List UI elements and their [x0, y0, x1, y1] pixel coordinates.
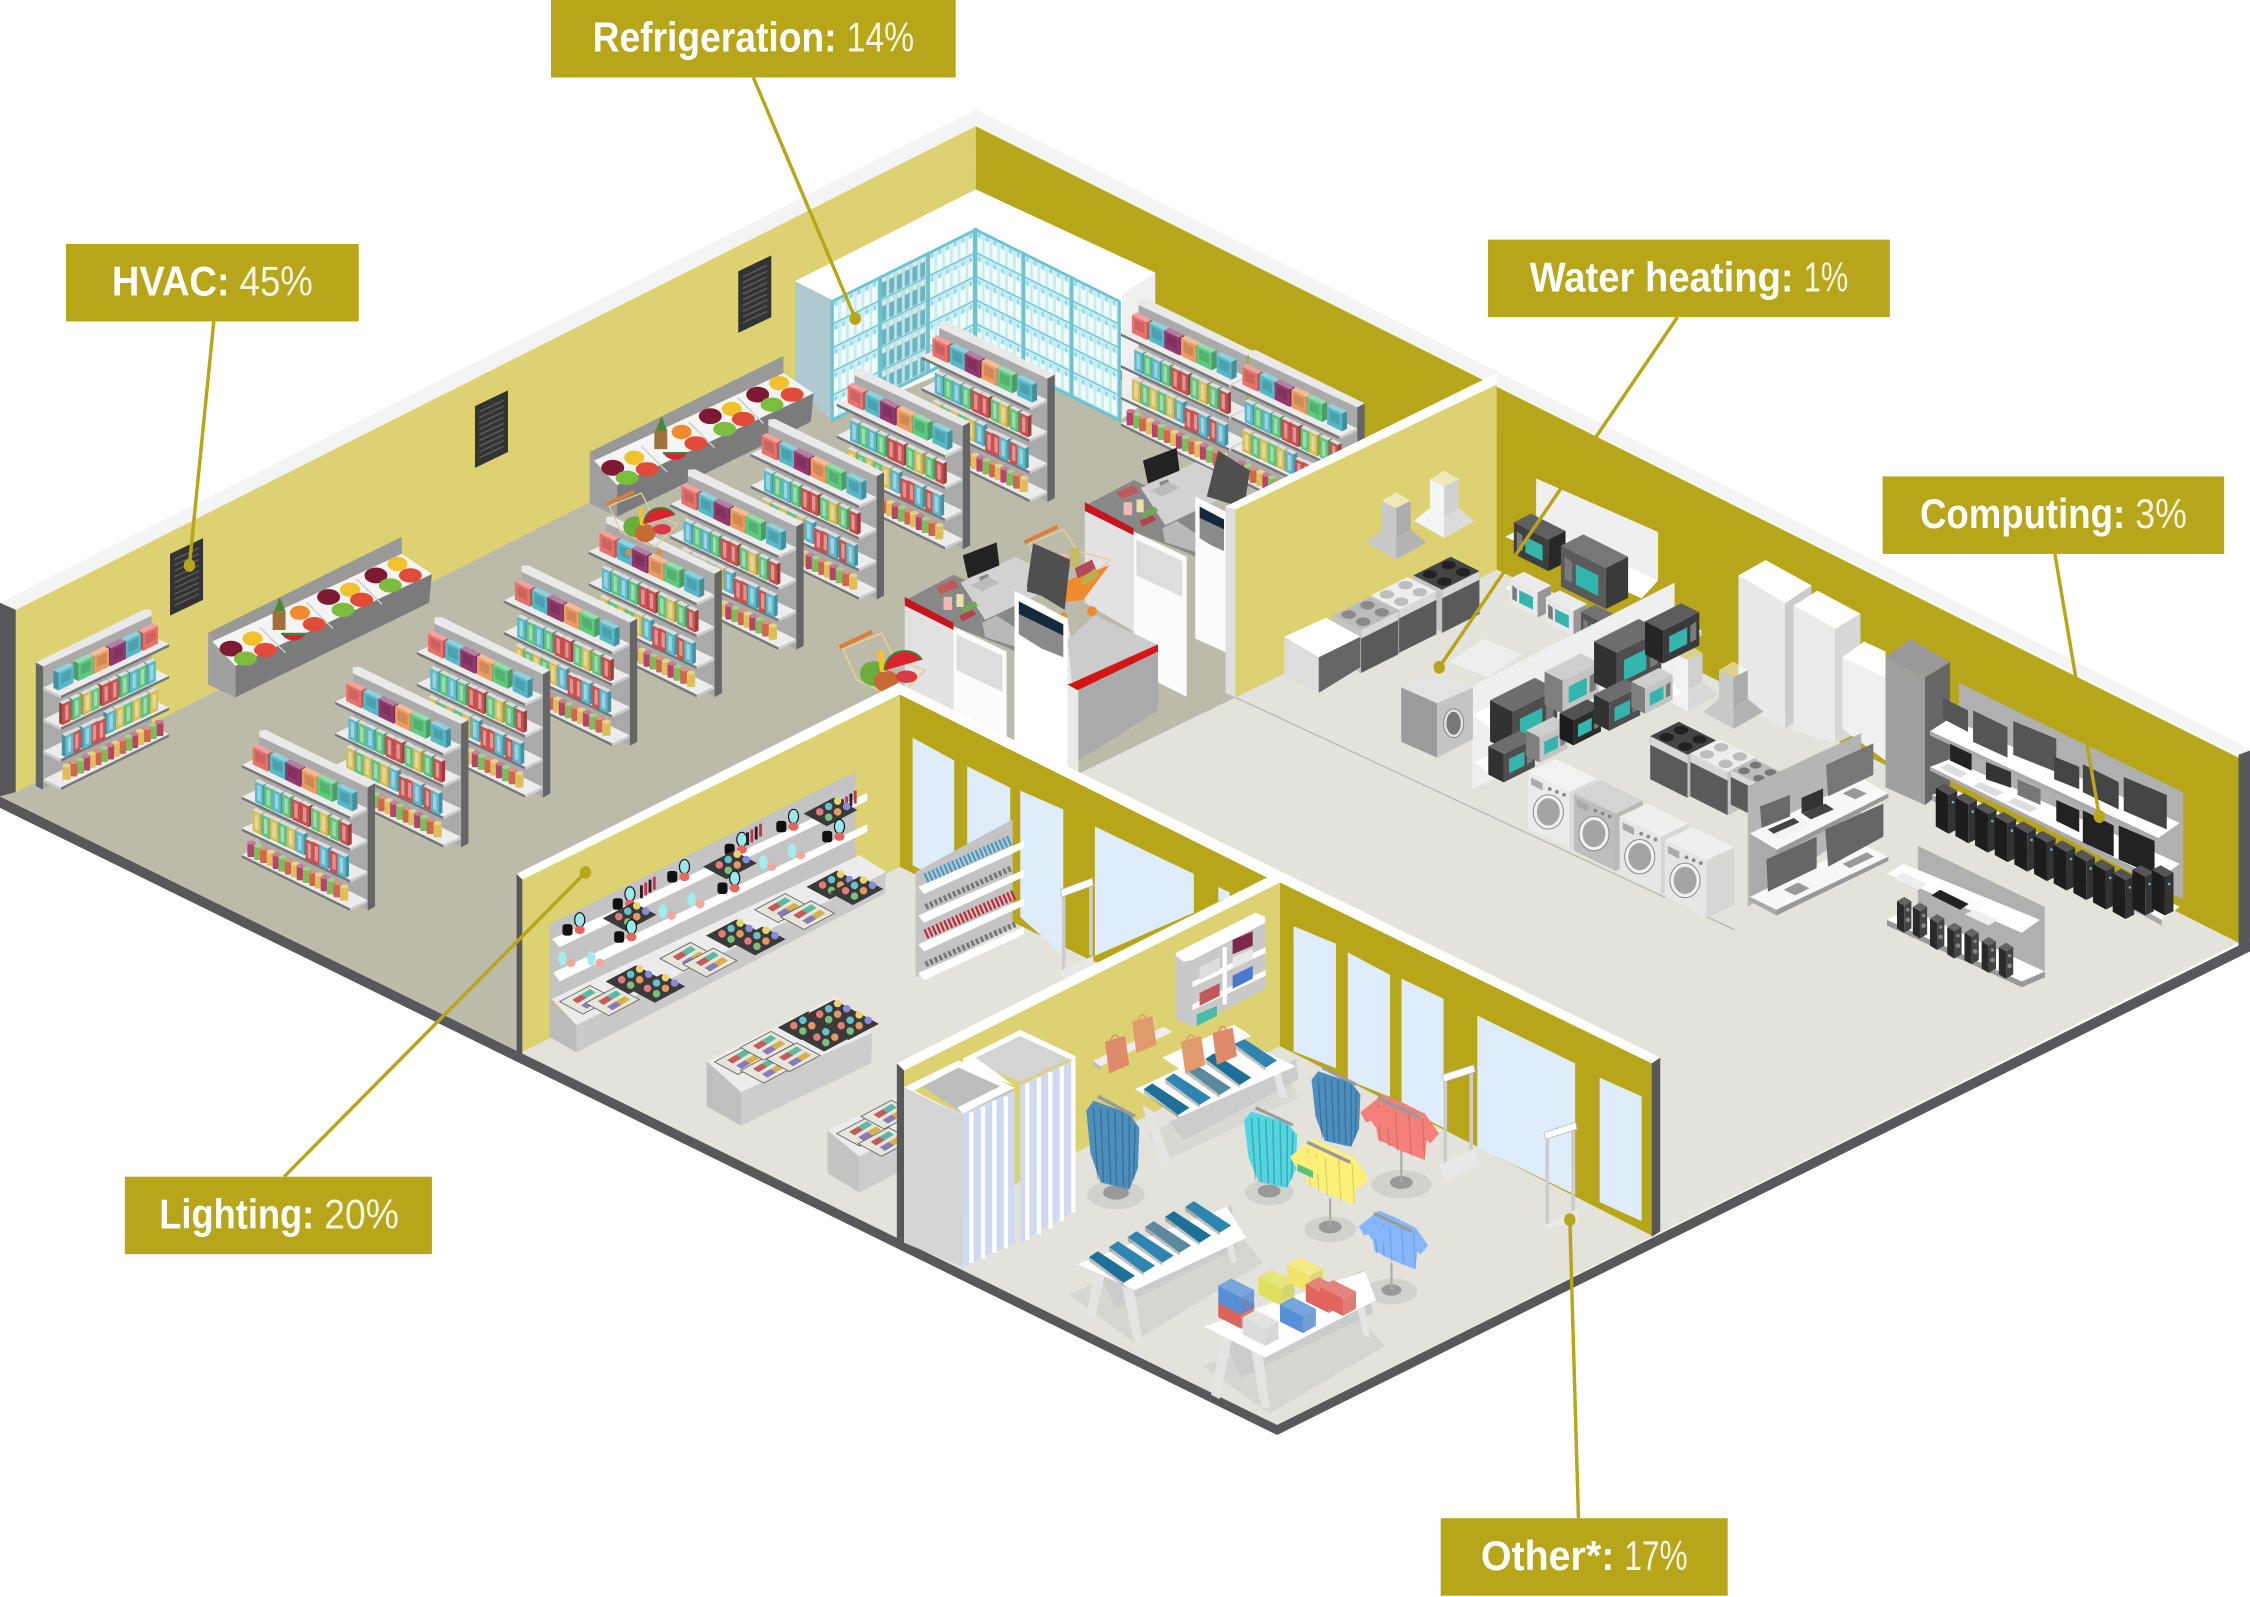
microwave island — [1450, 583, 1702, 789]
leader: lighting — [284, 866, 591, 1177]
back right wall — [976, 110, 2250, 947]
grocery aisle shelves — [242, 321, 1055, 911]
shelf unit: wall — [36, 609, 169, 790]
panel: clothing room walls — [897, 871, 1660, 1246]
display table: folded clothes — [1202, 1257, 1385, 1413]
display table: back — [1135, 1025, 1299, 1162]
panel: cosmetics room walls — [517, 683, 1280, 1055]
produce stand: left — [208, 537, 432, 697]
cube shelf — [1176, 913, 1266, 1027]
hanging rack: blue back — [1312, 1068, 1360, 1147]
back left wall — [0, 110, 976, 796]
label: Other 17% — [1441, 1518, 1728, 1596]
leader: computing — [2055, 554, 2105, 823]
stoves: aisle — [1650, 722, 1784, 819]
storefront windows: cosmetics — [913, 738, 1230, 956]
dishwasher and stoves — [1284, 557, 1479, 693]
lone washer — [1401, 672, 1473, 758]
range hoods — [1366, 471, 1474, 560]
hanging rack: light blue — [1359, 1211, 1428, 1304]
display table: front left — [1069, 1201, 1263, 1342]
computing wall display — [1930, 683, 2183, 926]
checkout counter: back — [1085, 448, 1250, 697]
hanging rack: yellow — [1290, 1139, 1369, 1242]
label: Lighting 20% — [125, 1177, 432, 1254]
computer accessories shelf — [1887, 846, 2045, 987]
label: HVAC 45%: 45% — [240, 258, 313, 305]
leader: water heating — [1434, 317, 1677, 674]
leader: other — [1564, 1213, 1578, 1518]
label: Refrigeration 14% — [551, 0, 956, 78]
bagging station — [1015, 543, 1158, 794]
hanging rack: cyan — [1244, 1108, 1297, 1205]
cosmetics shelf tower — [915, 819, 1024, 980]
label: HVAC 45% — [66, 244, 359, 321]
shelf units: back wall — [1121, 298, 1365, 531]
wall vents — [170, 255, 771, 616]
floor slab — [0, 307, 2250, 1435]
washing machines — [1528, 759, 1734, 918]
label: Water heating 1%: Water heating: — [1530, 253, 1794, 300]
label: Other 17%: 17% — [1624, 1532, 1687, 1579]
makeup display table — [707, 996, 879, 1126]
range hoods: aisle — [1658, 644, 1764, 729]
makeup display table: small — [828, 1097, 915, 1192]
shopping cart: orange basket — [1025, 527, 1109, 619]
back microwave shelf — [1505, 478, 1658, 653]
label: Computing 3%: 3% — [2135, 490, 2187, 537]
label: Computing 3%: Computing: — [1920, 490, 2125, 537]
shopping cart: front — [840, 632, 925, 708]
checkout counter: front — [905, 542, 1070, 791]
monitor island — [1748, 733, 1888, 916]
leader: refrigeration — [753, 78, 861, 325]
gate: clothing back — [1439, 1065, 1477, 1181]
fitting rooms — [904, 1030, 1075, 1267]
hanging rack: blue — [1086, 1096, 1145, 1209]
label: Refrigeration 14%: Refrigeration: — [593, 14, 837, 61]
label: Other 17%: Other*: — [1481, 1532, 1614, 1579]
label: Lighting 20%: Lighting: — [159, 1190, 314, 1237]
cosmetics wall counter — [550, 772, 886, 1052]
label: HVAC 45%: HVAC: — [112, 258, 230, 305]
hanging rack: coral — [1360, 1095, 1439, 1199]
produce stand: back — [590, 356, 814, 517]
gate: clothing front — [1541, 1122, 1578, 1228]
label: Water heating 1%: 1% — [1804, 253, 1848, 300]
bag wall shelf — [1093, 1015, 1172, 1073]
label: Lighting 20%: 20% — [324, 1190, 399, 1237]
shopping cart: back aisle — [607, 492, 678, 555]
storefront windows: clothing — [1294, 926, 1642, 1221]
tall refrigerators — [1738, 560, 1950, 805]
leader: HVAC — [184, 321, 214, 572]
back partition wall — [1225, 373, 1497, 697]
security gate: cosmetics — [1059, 878, 1093, 979]
label: Water heating 1% — [1488, 240, 1890, 317]
refrigerated cases — [795, 189, 1155, 420]
label: Refrigeration 14%: 14% — [847, 14, 914, 61]
label: Computing 3% — [1883, 476, 2224, 554]
